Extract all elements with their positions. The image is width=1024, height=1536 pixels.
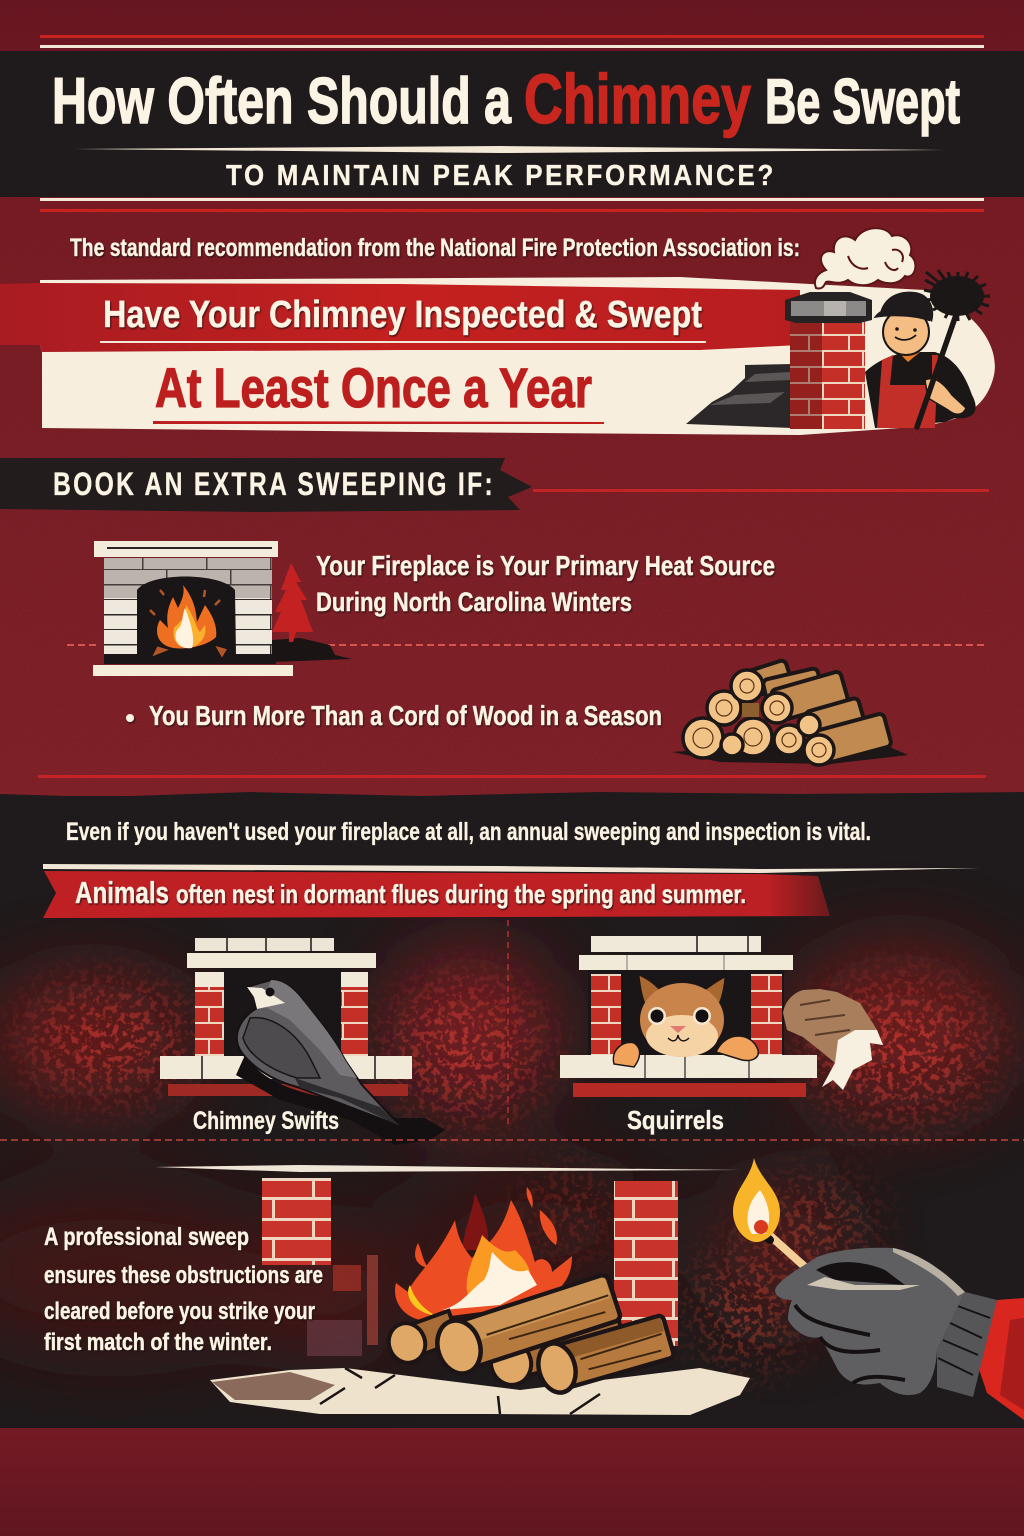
text: professional sweep: first match of the winter. [44,1329,272,1356]
icon: brick chimney [785,292,872,429]
text: professional sweep [44,1223,323,1356]
title underline [75,146,945,153]
text: primary heat source [316,550,775,617]
hearth right bricks [614,1181,678,1346]
icon: stone fireplace [93,541,352,676]
sleeve [977,1298,1024,1420]
title heading: Chimney [524,60,751,138]
fireplace for swift [160,938,412,1096]
fireplace for squirrel [560,936,817,1097]
banner frequency text: At Least Once a Year [155,356,592,419]
firewood logs [383,1271,675,1397]
swift bird [237,980,400,1126]
text: primary heat source: During North Carolina Winters [316,587,632,617]
banner red ribbon [0,283,800,352]
icon: gloved hand with match [733,1158,1024,1420]
bottom footer band [0,1428,1024,1536]
swift shadow [236,1055,445,1145]
text: burn more than a cord: You Burn More Than a Cord of Wood in a Season [149,700,662,731]
label: chimney swifts: Chimney Swifts [193,1107,339,1135]
icon: fireplace flame [150,585,225,655]
subtitle: TO MAINTAIN PEAK PERFORMANCE? [226,160,776,192]
banner headline: Have Your Chimney Inspected & Swept [103,294,702,336]
icon: chimney brush [917,312,957,427]
squirrel paws [613,1036,758,1067]
dashed vertical divider [507,920,509,1125]
icon: cloud of smoke [815,228,915,289]
red texture behind animals [0,950,1010,1360]
title heading [52,60,960,138]
panel: yearly recommendation banner [0,228,995,435]
illustration: squirrel in fireplace [560,936,883,1135]
text: professional sweep: ensures these obstructions are [44,1262,323,1289]
match stick [766,1232,814,1275]
icon: chimney sweep person [865,270,990,428]
ribbon: animals nest [43,864,980,918]
banner white shape [40,277,995,435]
title panel [0,35,1024,212]
illustration: lit hearth [155,1165,750,1415]
label: squirrels: Squirrels [627,1105,724,1135]
title heading: How Often Should a [52,64,512,137]
text: professional sweep: A professional sweep [44,1223,249,1251]
icon: stacked firewood [672,659,908,765]
intro sentence: The standard recommendation from the National Fire Protection Association is: [70,234,800,262]
panel: dark animal and hearth band [0,792,1024,1428]
section heading: book an extra sweeping: BOOK AN EXTRA SWEEPING IF: [53,466,495,502]
red section divider [38,775,986,778]
ribbon: animals nest: often nest in dormant flues during the spring and summer. [176,879,746,909]
squirrel head [639,975,725,1057]
text: primary heat source: Your Fireplace is Your Primary Heat Source [316,550,775,581]
match flame [733,1158,780,1242]
glove [775,1248,965,1395]
text: professional sweep: cleared before you strike your [44,1298,315,1325]
squirrel tail [783,989,883,1090]
hearth stone floor [210,1368,750,1415]
hearth faded bricks [307,1255,378,1356]
icon: roof shingles [686,364,792,428]
icon: red pine tree [272,563,313,642]
section heading: book an extra sweeping [0,458,989,512]
glove cuff [937,1292,997,1397]
ribbon: animals nest: Animals [75,875,169,910]
hearth left bricks [262,1178,331,1265]
hearth mantel [155,1165,740,1172]
fire flames [395,1187,572,1320]
illustration: chimney swift in fireplace [160,938,445,1145]
dashed horizontal divider [0,1139,1024,1141]
dashed divider [67,644,988,646]
